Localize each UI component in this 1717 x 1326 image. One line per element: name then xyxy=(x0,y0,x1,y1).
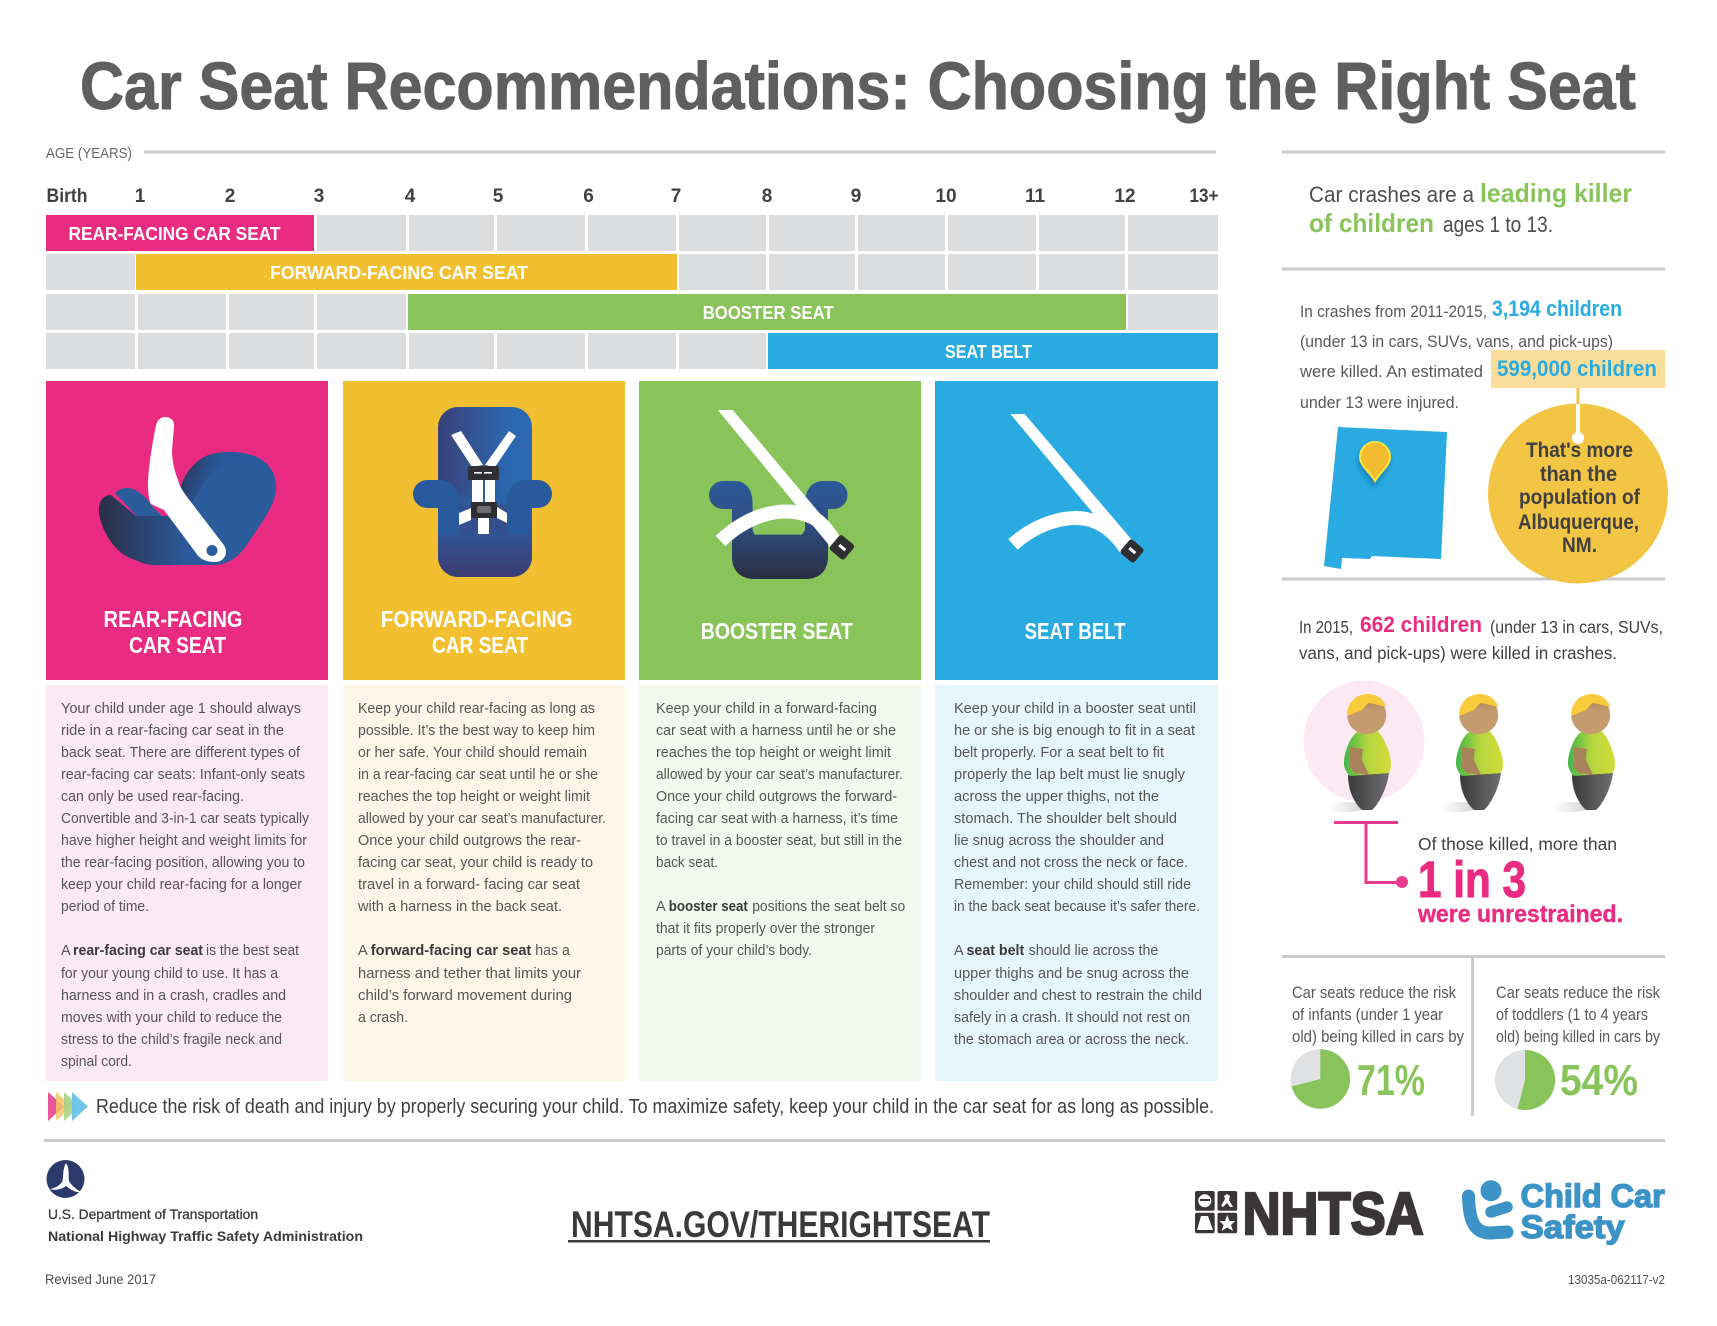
icon: booster seat with belt xyxy=(709,410,855,579)
icon: colored arrows xyxy=(48,1092,88,1121)
text block: rear-facing car seat: A xyxy=(61,943,71,959)
age scale labels: Birth xyxy=(46,186,88,207)
statistic: infants 71%: old) being killed in cars by xyxy=(1292,1027,1464,1046)
panel: forward-facing car seat xyxy=(343,381,625,680)
age scale labels: 11 xyxy=(1025,186,1045,207)
age scale labels: 8 xyxy=(762,186,772,207)
text block: seat belt: lie snug across the shoulder and xyxy=(954,833,1164,849)
text block: seat belt: in the back seat because it’s safer there. xyxy=(954,899,1200,915)
safety message: Reduce the risk of death and injury by properly securing your child. To maximize safety, keep your child in the car seat for as long as possible. xyxy=(96,1096,1214,1118)
text block: seat belt: across the upper thighs, not the xyxy=(954,789,1159,805)
callout: Albuquerque comparison xyxy=(1488,404,1668,584)
text block: seat belt: stomach. The shoulder belt should xyxy=(954,811,1177,827)
text block: forward-facing car seat: facing car seat, your child is ready to xyxy=(358,855,593,871)
text block: seat belt: seat belt xyxy=(966,943,1024,959)
text block: seat belt: should lie across the xyxy=(1029,943,1158,959)
timeline row: forward-facing car seat: FORWARD-FACING CAR SEAT xyxy=(270,263,528,283)
text block: rear-facing car seat: Your child under age 1 should always xyxy=(61,701,301,717)
statistic: crashes 2011-2015: 3,194 children xyxy=(1492,296,1622,321)
text block: forward-facing car seat: possible. It’s the best way to keep him xyxy=(358,723,595,739)
text block: rear-facing car seat: moves with your child to reduce the xyxy=(61,1010,282,1026)
callout: 1 in 3 unrestrained: 1 in 3 xyxy=(1418,851,1526,908)
statistic: toddlers 54%: 54% xyxy=(1560,1056,1638,1105)
text block: seat belt: he or she is big enough to fit in a seat xyxy=(954,723,1195,739)
logo: NHTSA: NHTSA xyxy=(1243,1181,1424,1247)
text block: rear-facing car seat: ride in a rear-facing car seat in the xyxy=(61,723,284,739)
text block: seat belt: the stomach area or across the neck. xyxy=(954,1032,1189,1048)
heading: SEAT BELT xyxy=(1025,618,1126,644)
statistic: crashes 2011-2015: (under 13 in cars, SUVs, vans, and pick-ups) xyxy=(1300,332,1613,351)
statistic: crashes 2011-2015: under 13 were injured. xyxy=(1300,393,1459,412)
heading: FORWARD-FACING xyxy=(381,606,573,632)
statistic: 662 children: (under 13 in cars, SUVs, xyxy=(1490,617,1663,637)
statistic: infants 71%: of infants (under 1 year xyxy=(1292,1005,1443,1024)
age axis heading xyxy=(46,145,1216,162)
sidebar dividers xyxy=(44,150,1665,1142)
callout: leading killer: of children xyxy=(1309,208,1434,238)
callout: 1 in 3 unrestrained xyxy=(1417,834,1623,928)
text block: forward-facing car seat: reaches the top height or weight limit xyxy=(358,789,590,805)
text block: rear-facing car seat: for your young child to use. It has a xyxy=(61,966,279,982)
heading: REAR-FACING xyxy=(104,606,242,632)
statistic: crashes 2011-2015 xyxy=(1299,296,1622,412)
text block: rear-facing car seat: period of time. xyxy=(61,899,149,915)
text block: seat belt: safely in a crash. It should not rest on xyxy=(954,1010,1190,1026)
statistic: 662 children: 662 children xyxy=(1360,612,1482,637)
text block: booster seat: that it fits properly over the stronger xyxy=(656,921,875,937)
agency name xyxy=(48,1206,363,1244)
icon: child 1 xyxy=(1325,694,1391,812)
logo: Child Car Safety: Child Car xyxy=(1521,1178,1665,1214)
heading: CAR SEAT xyxy=(129,632,226,658)
statistic: toddlers 54%: Car seats reduce the risk xyxy=(1496,983,1660,1002)
callout: 1 in 3 unrestrained: Of those killed, more than xyxy=(1418,834,1617,854)
text block: forward-facing car seat: a crash. xyxy=(358,1010,408,1026)
statistic: 662 children xyxy=(1299,612,1663,663)
statistic: infants 71%: 71% xyxy=(1357,1056,1425,1105)
text block: booster seat: to travel in a booster seat, but still in the xyxy=(656,833,902,849)
timeline row: forward-facing car seat xyxy=(46,254,1218,290)
text block: booster seat: A xyxy=(656,899,666,915)
agency name: U.S. Department of Transportation xyxy=(48,1206,258,1222)
highlighted number xyxy=(1491,350,1665,388)
callout: leading killer: leading killer xyxy=(1480,178,1632,208)
age scale labels: 4 xyxy=(405,186,416,207)
statistic: infants 71% xyxy=(1291,983,1464,1109)
callout: leading killer: ages 1 to 13. xyxy=(1443,212,1553,237)
text block: rear-facing car seat: stress to the child’s fragile neck and xyxy=(61,1032,282,1048)
text block: booster seat: back seat. xyxy=(656,855,718,871)
text block: forward-facing car seat: A xyxy=(358,943,368,959)
text block: seat belt: Keep your child in a booster seat until xyxy=(954,701,1196,717)
heading: BOOSTER SEAT xyxy=(701,618,853,644)
text block: rear-facing car seat: back seat. There are different types of xyxy=(61,745,301,761)
text block: rear-facing car seat: can only be used rear-facing. xyxy=(61,789,244,805)
statistic: crashes 2011-2015: were killed. An estimated xyxy=(1299,362,1483,381)
statistic: toddlers 54% xyxy=(1495,983,1660,1110)
age scale labels: 12 xyxy=(1114,186,1136,207)
age scale labels: 7 xyxy=(671,186,681,207)
icon: child 3 xyxy=(1549,694,1615,812)
callout: Albuquerque comparison: That's more xyxy=(1526,439,1633,462)
text block: forward-facing car seat: child’s forward movement during xyxy=(358,988,572,1004)
text block: booster seat: car seat with a harness until he or she xyxy=(656,723,896,739)
age scale labels: 3 xyxy=(314,186,324,207)
text block: forward-facing car seat: harness and tether that limits your xyxy=(358,966,581,982)
statistic: 662 children: In 2015, xyxy=(1299,617,1353,637)
text block: forward-facing car seat xyxy=(343,685,625,1081)
statistic: crashes 2011-2015: In crashes from 2011-2015, xyxy=(1300,302,1487,321)
text block: booster seat: Once your child outgrows the forward- xyxy=(656,789,897,805)
icon: New Mexico map xyxy=(1324,427,1447,569)
text block: booster seat: facing car seat with a harness, it’s time xyxy=(656,811,898,827)
text block: seat belt: properly the lap belt must lie snugly xyxy=(954,767,1186,783)
text block: booster seat xyxy=(639,685,921,1081)
text block: booster seat: parts of your child’s body. xyxy=(656,943,812,959)
heading: CAR SEAT xyxy=(432,632,528,658)
timeline row: booster seat xyxy=(46,294,1218,330)
heading xyxy=(104,606,242,658)
callout: Albuquerque comparison: Albuquerque, xyxy=(1518,511,1639,534)
text block: forward-facing car seat: has a xyxy=(535,943,571,959)
text block: rear-facing car seat: keep your child rear-facing for a longer xyxy=(61,877,302,893)
text block: forward-facing car seat: allowed by your car seat’s manufacturer. xyxy=(358,811,606,827)
icon: seat belt xyxy=(1010,414,1145,564)
callout: Albuquerque comparison: population of xyxy=(1519,486,1641,509)
text block: rear-facing car seat: rear-facing car seat xyxy=(73,943,203,959)
text block: seat belt: chest and not cross the neck or face. xyxy=(954,855,1188,871)
icon: child 2 xyxy=(1437,694,1503,812)
timeline chart xyxy=(46,215,1218,369)
text block: booster seat: Keep your child in a forward-facing xyxy=(656,701,877,717)
logo: DOT xyxy=(46,1160,84,1198)
panel: rear-facing car seat xyxy=(46,381,328,680)
text block: forward-facing car seat: in a rear-facing car seat until he or she xyxy=(358,767,598,783)
revised date: Revised June 2017 xyxy=(45,1271,156,1287)
statistic: toddlers 54%: old) being killed in cars by xyxy=(1496,1027,1660,1046)
text block: forward-facing car seat: Once your child outgrows the rear- xyxy=(358,833,581,849)
logo: Child Car Safety xyxy=(1468,1178,1665,1245)
age scale labels: 5 xyxy=(493,186,504,207)
pink highlight circle xyxy=(1304,680,1424,802)
text block: seat belt xyxy=(935,685,1218,1081)
text block: booster seat: reaches the top height or weight limit xyxy=(656,745,891,761)
text block: forward-facing car seat: with a harness in the back seat. xyxy=(357,899,562,915)
text block: booster seat: allowed by your car seat’s manufacturer. xyxy=(656,767,903,783)
connector line xyxy=(1576,388,1580,405)
age axis heading: AGE (YEARS) xyxy=(46,145,132,162)
text block: rear-facing car seat: spinal cord. xyxy=(61,1054,132,1070)
timeline row: rear-facing car seat: REAR-FACING CAR SEAT xyxy=(68,224,280,244)
text block: forward-facing car seat: Keep your child rear-facing as long as xyxy=(358,701,595,717)
age scale labels: 2 xyxy=(225,186,235,207)
text block: rear-facing car seat: harness and in a crash, cradles and xyxy=(61,988,286,1004)
callout: Albuquerque comparison: than the xyxy=(1540,463,1617,486)
text block: forward-facing car seat: or her safe. Your child should remain xyxy=(358,745,587,761)
timeline row: booster seat: BOOSTER SEAT xyxy=(703,303,834,323)
timeline row: rear-facing car seat xyxy=(46,215,1218,251)
text block: booster seat: booster seat xyxy=(669,899,748,915)
text block: seat belt: shoulder and chest to restrain the child xyxy=(954,988,1202,1004)
callout: Albuquerque comparison: NM. xyxy=(1562,534,1597,557)
text block: seat belt: upper thighs and be snug across the xyxy=(954,966,1189,982)
statistic: infants 71%: Car seats reduce the risk xyxy=(1292,983,1456,1002)
text block: forward-facing car seat: travel in a forward- facing car seat xyxy=(358,877,580,893)
statistic: toddlers 54%: of toddlers (1 to 4 years xyxy=(1496,1005,1648,1024)
timeline row: seat belt xyxy=(46,333,1218,369)
text block: seat belt: belt properly. For a seat belt to fit xyxy=(954,745,1164,761)
icon grid xyxy=(1195,1191,1237,1233)
website link: NHTSA.GOV/THERIGHTSEAT xyxy=(571,1204,990,1245)
text block: rear-facing car seat: have higher height and weight limits for xyxy=(61,833,307,849)
publication code: 13035a-062117-v2 xyxy=(1568,1272,1665,1287)
callout: 1 in 3 unrestrained: were unrestrained. xyxy=(1417,901,1623,928)
highlighted number: 599,000 children xyxy=(1497,356,1657,381)
text block: booster seat: positions the seat belt so xyxy=(752,899,905,915)
age scale labels: 1 xyxy=(135,186,146,207)
icon: rear-facing infant seat xyxy=(99,417,276,565)
timeline row: seat belt: SEAT BELT xyxy=(945,342,1032,362)
bracket connector xyxy=(1334,822,1408,888)
callout: leading killer xyxy=(1309,178,1632,238)
age scale labels xyxy=(46,186,1218,207)
pie chart: 71% xyxy=(1291,1049,1350,1109)
age scale labels: 6 xyxy=(583,186,594,207)
heading xyxy=(381,606,573,658)
pie chart: 54% xyxy=(1495,1050,1555,1110)
panel: booster seat xyxy=(639,381,921,680)
text block: seat belt: A xyxy=(954,943,964,959)
text block: rear-facing car seat: Convertible and 3-in-1 car seats typically xyxy=(61,811,310,827)
age scale labels: 10 xyxy=(935,186,957,207)
agency name: National Highway Traffic Safety Administration xyxy=(48,1228,363,1244)
text block: forward-facing car seat: forward-facing car seat xyxy=(371,943,531,959)
text block: rear-facing car seat: the rear-facing position, allowing you to xyxy=(61,855,305,871)
text block: rear-facing car seat: is the best seat xyxy=(206,943,299,959)
panel: seat belt xyxy=(935,381,1218,680)
text block: rear-facing car seat: rear-facing car seats: Infant-only seats xyxy=(61,767,305,783)
icon: forward-facing harness seat xyxy=(413,407,552,577)
statistic: 662 children: vans, and pick-ups) were killed in crashes. xyxy=(1299,643,1617,663)
age scale labels: 9 xyxy=(851,186,861,207)
logo: Child Car Safety: Safety xyxy=(1521,1209,1625,1245)
text block: seat belt: Remember: your child should still ride xyxy=(954,877,1191,893)
age scale labels: 13+ xyxy=(1190,186,1218,207)
text block: rear-facing car seat xyxy=(46,685,328,1081)
callout: leading killer: Car crashes are a xyxy=(1309,182,1475,207)
